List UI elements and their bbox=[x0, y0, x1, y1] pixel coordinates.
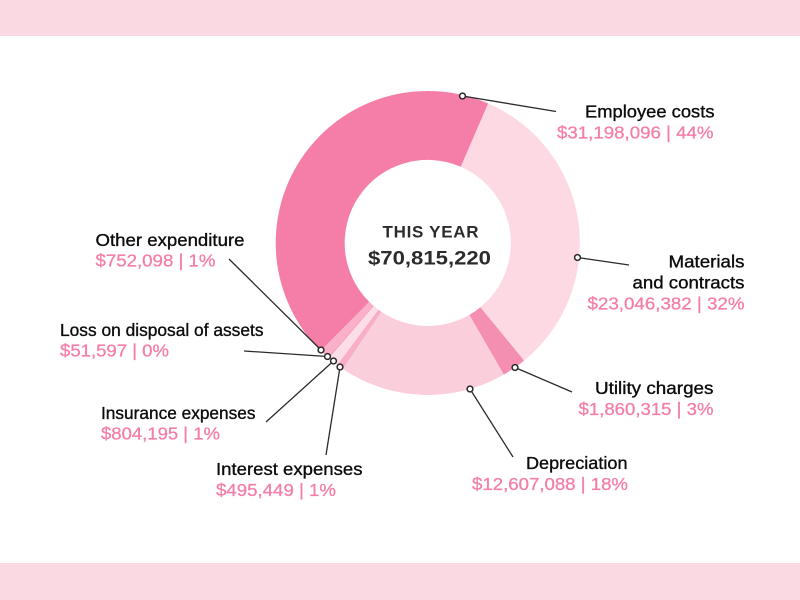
label: materials and contracts: Materials bbox=[668, 252, 745, 272]
leader: materials and contracts bbox=[575, 255, 629, 265]
leader: interest expenses bbox=[326, 364, 343, 455]
label: depreciation: $12,607,088 | 18% bbox=[472, 474, 628, 494]
label: employee costs: Employee costs bbox=[585, 102, 715, 122]
label: utility charges bbox=[578, 378, 714, 419]
segment: materials and contracts bbox=[461, 104, 580, 361]
label: interest expenses: $495,449 | 1% bbox=[216, 480, 336, 500]
center total bbox=[368, 222, 491, 270]
label: materials and contracts: $23,046,382 | 32% bbox=[588, 294, 744, 314]
center heading: THIS YEAR bbox=[382, 222, 478, 242]
bottom band bbox=[0, 563, 800, 600]
segment: loss on disposal of assets bbox=[328, 306, 374, 358]
donut chart bbox=[276, 91, 580, 395]
label: other expenditure bbox=[96, 230, 244, 270]
segment: employee costs bbox=[276, 91, 488, 351]
label: loss on disposal of assets bbox=[60, 320, 264, 360]
segment: insurance expenses bbox=[329, 306, 378, 365]
label: loss on disposal of assets: Loss on disposal of assets bbox=[60, 320, 264, 340]
label: utility charges: Utility charges bbox=[595, 378, 714, 398]
label: insurance expenses: $804,195 | 1% bbox=[101, 424, 220, 444]
label: utility charges: $1,860,315 | 3% bbox=[578, 399, 714, 419]
label: loss on disposal of assets: $51,597 | 0% bbox=[60, 340, 169, 360]
label: depreciation: Depreciation bbox=[526, 453, 628, 473]
leader: depreciation bbox=[467, 386, 513, 457]
leader: utility charges bbox=[512, 365, 572, 392]
top band bbox=[0, 0, 800, 36]
label: insurance expenses: Insurance expenses bbox=[101, 403, 256, 423]
leader: loss on disposal of assets bbox=[244, 351, 330, 359]
label: interest expenses: Interest expenses bbox=[216, 459, 363, 479]
center amount: $70,815,220 bbox=[368, 248, 491, 270]
label: insurance expenses bbox=[101, 403, 256, 444]
segment: other expenditure bbox=[321, 302, 373, 358]
segment: depreciation bbox=[343, 312, 504, 395]
label: materials and contracts: and contracts bbox=[632, 272, 745, 292]
label: other expenditure: $752,098 | 1% bbox=[96, 250, 216, 270]
label: materials and contracts bbox=[588, 252, 745, 314]
leader: other expenditure bbox=[229, 259, 324, 353]
label: depreciation bbox=[472, 453, 628, 494]
label: employee costs bbox=[557, 102, 715, 142]
segment: utility charges bbox=[469, 307, 524, 375]
leader: insurance expenses bbox=[266, 358, 336, 422]
label: interest expenses bbox=[216, 459, 363, 500]
segment: interest expenses bbox=[337, 310, 381, 369]
label: employee costs: $31,198,096 | 44% bbox=[557, 122, 714, 142]
leader: employee costs bbox=[460, 93, 556, 112]
label: other expenditure: Other expenditure bbox=[96, 230, 244, 250]
